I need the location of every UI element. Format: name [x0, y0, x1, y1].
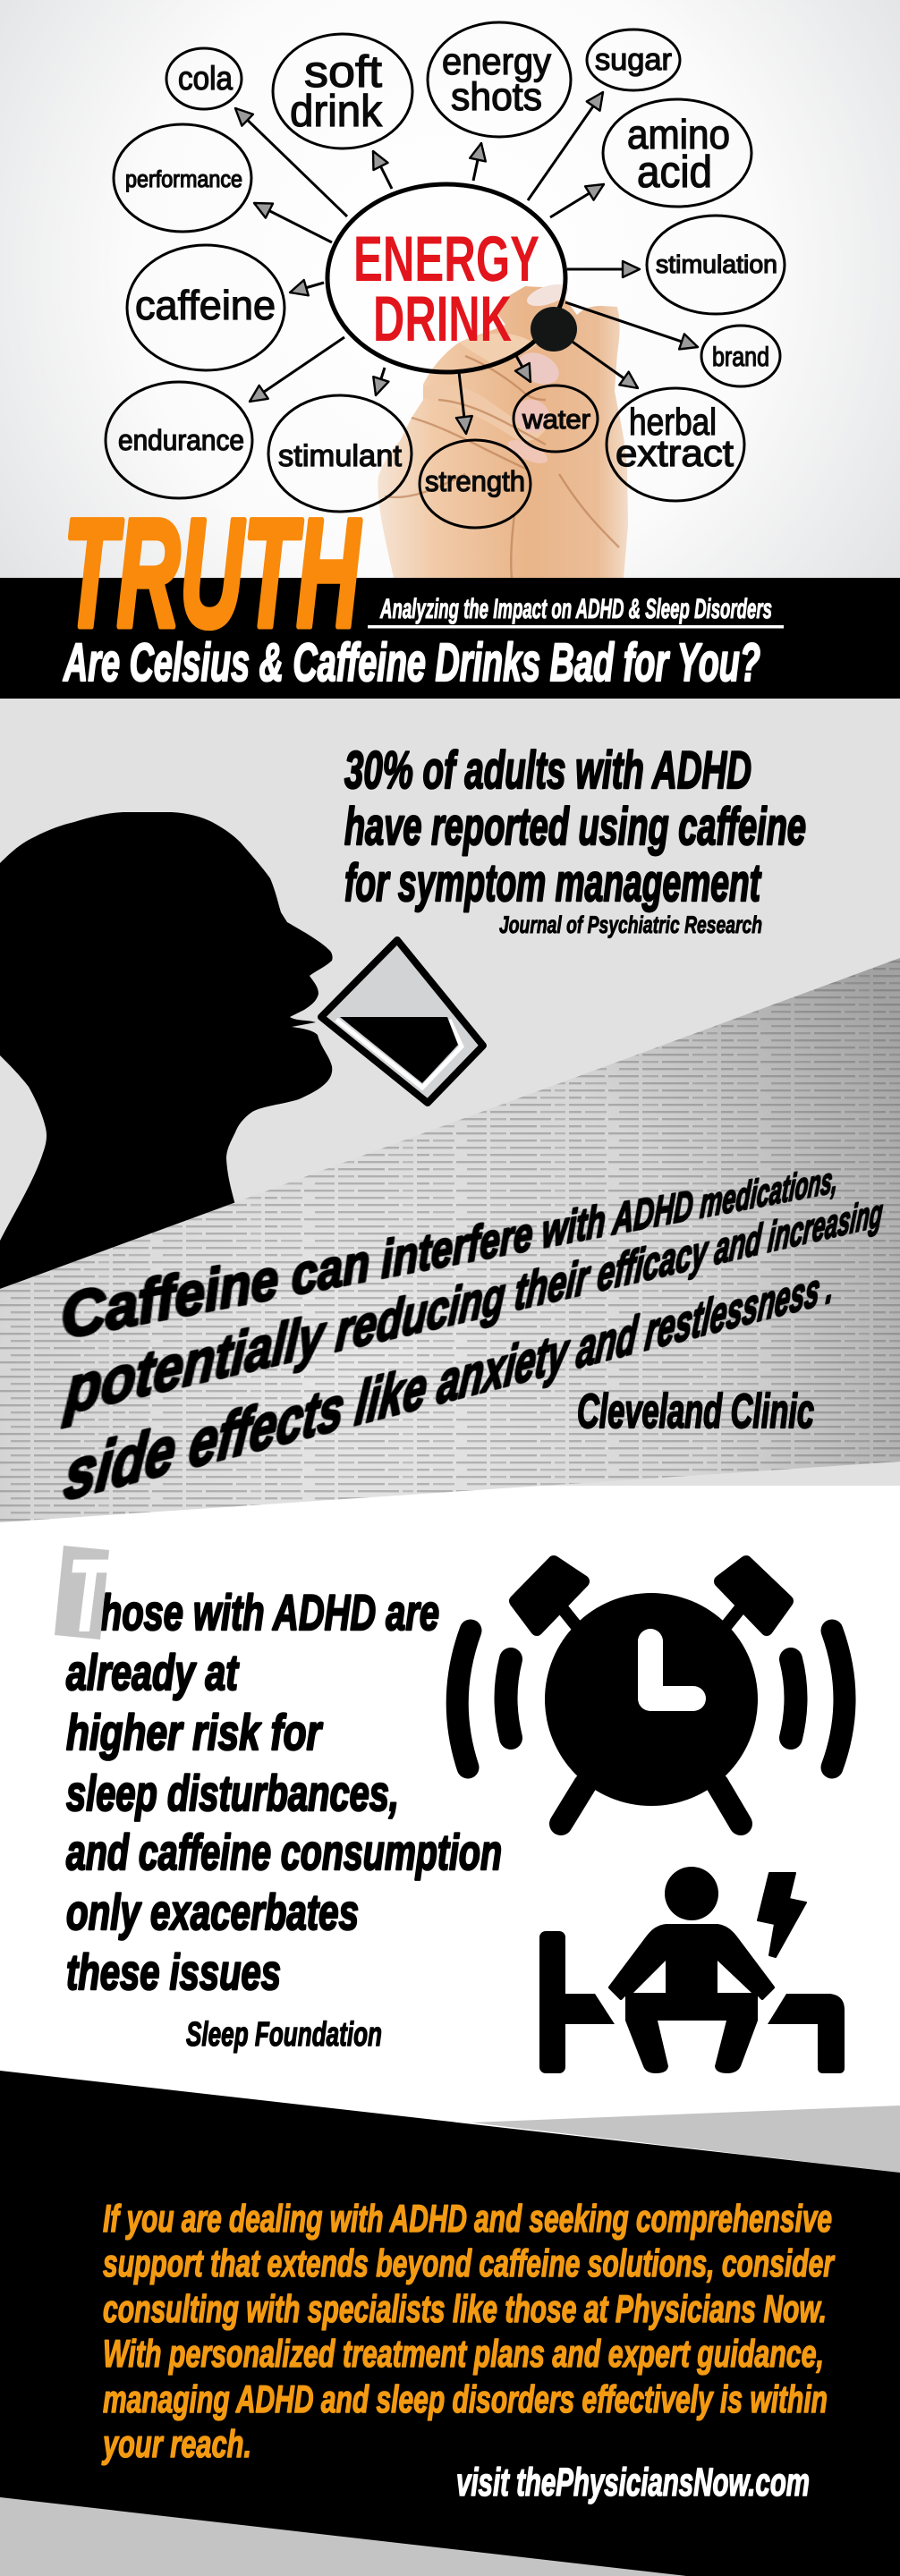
topic bubbles [106, 22, 785, 528]
paragraph: those with ADHD: hose with ADHD are [100, 1584, 439, 1640]
centre label: ENERGY DRINK: ENERGY [353, 224, 539, 295]
bubble labels: soft [304, 47, 382, 97]
bubble labels [118, 40, 777, 497]
bubble labels: water [522, 405, 590, 435]
drop cap T [55, 1539, 112, 1653]
bubble labels: performance [125, 165, 242, 192]
icon: person on bench with lightning bolt [539, 1867, 845, 2073]
panel: caffeine statistic background [0, 699, 900, 1486]
bubble labels: cola [178, 60, 233, 97]
title bar [0, 578, 900, 699]
hero panel: energy drink mind map [0, 0, 900, 699]
bubble labels: stimulant [278, 439, 403, 473]
call to action paragraph [102, 2198, 836, 2466]
bubble labels: herbal [629, 401, 717, 443]
bubble labels: strength [425, 465, 525, 497]
bubble labels: sugar [595, 43, 672, 77]
bubble labels: shots [451, 75, 542, 119]
bubble labels: drink [290, 86, 383, 136]
headline: TRUTH: TRUTH [64, 487, 361, 659]
bubble labels: extract [616, 432, 734, 474]
call to action paragraph: your reach. [102, 2423, 251, 2466]
bubble labels: brand [712, 343, 769, 372]
paragraph: those with ADHD [66, 1584, 502, 2000]
panel: diagonal textured band [0, 958, 900, 1522]
band paragraph: caffeine can interfere [58, 1171, 900, 2168]
paragraph: those with ADHD: sleep disturbances, [66, 1765, 399, 1821]
accent: grey wedge top right [471, 2106, 900, 2173]
drop cap T: T [68, 1539, 112, 1653]
centre label: ENERGY DRINK: DRINK [373, 284, 512, 355]
marker pen tip [531, 307, 577, 352]
paragraph: those with ADHD: and caffeine consumption [66, 1824, 502, 1880]
arrows radiating from centre [235, 92, 698, 434]
icon: ringing alarm clock [457, 1562, 845, 1824]
centre bubble [327, 184, 565, 372]
bubble labels: energy [442, 40, 551, 82]
stat source: Journal of Psychiatric Research [499, 911, 762, 938]
centre label: ENERGY DRINK [353, 224, 539, 355]
paragraph: those with ADHD: these issues [66, 1944, 281, 2000]
paragraph: those with ADHD: already at [66, 1644, 240, 1700]
stat text: 30 percent of adults [344, 741, 806, 912]
panel: call to action [0, 2071, 900, 2576]
icon: tilted glass [321, 940, 483, 1103]
icon: silhouette of person drinking [0, 812, 333, 1289]
subtitle rule [368, 625, 784, 628]
accent: grey wedge bottom left [0, 2497, 686, 2576]
paragraph: those with ADHD: only exacerbates [66, 1884, 359, 1940]
photo: hand holding marker [378, 280, 628, 578]
bubble labels: endurance [118, 424, 244, 456]
bubble labels: amino [627, 111, 730, 157]
paragraph: those with ADHD: higher risk for [66, 1704, 323, 1760]
bubble labels: caffeine [135, 282, 276, 328]
bubble labels: acid [637, 147, 712, 197]
paragraph source: Sleep Foundation [186, 2016, 382, 2054]
bubble labels: stimulation [656, 250, 777, 278]
